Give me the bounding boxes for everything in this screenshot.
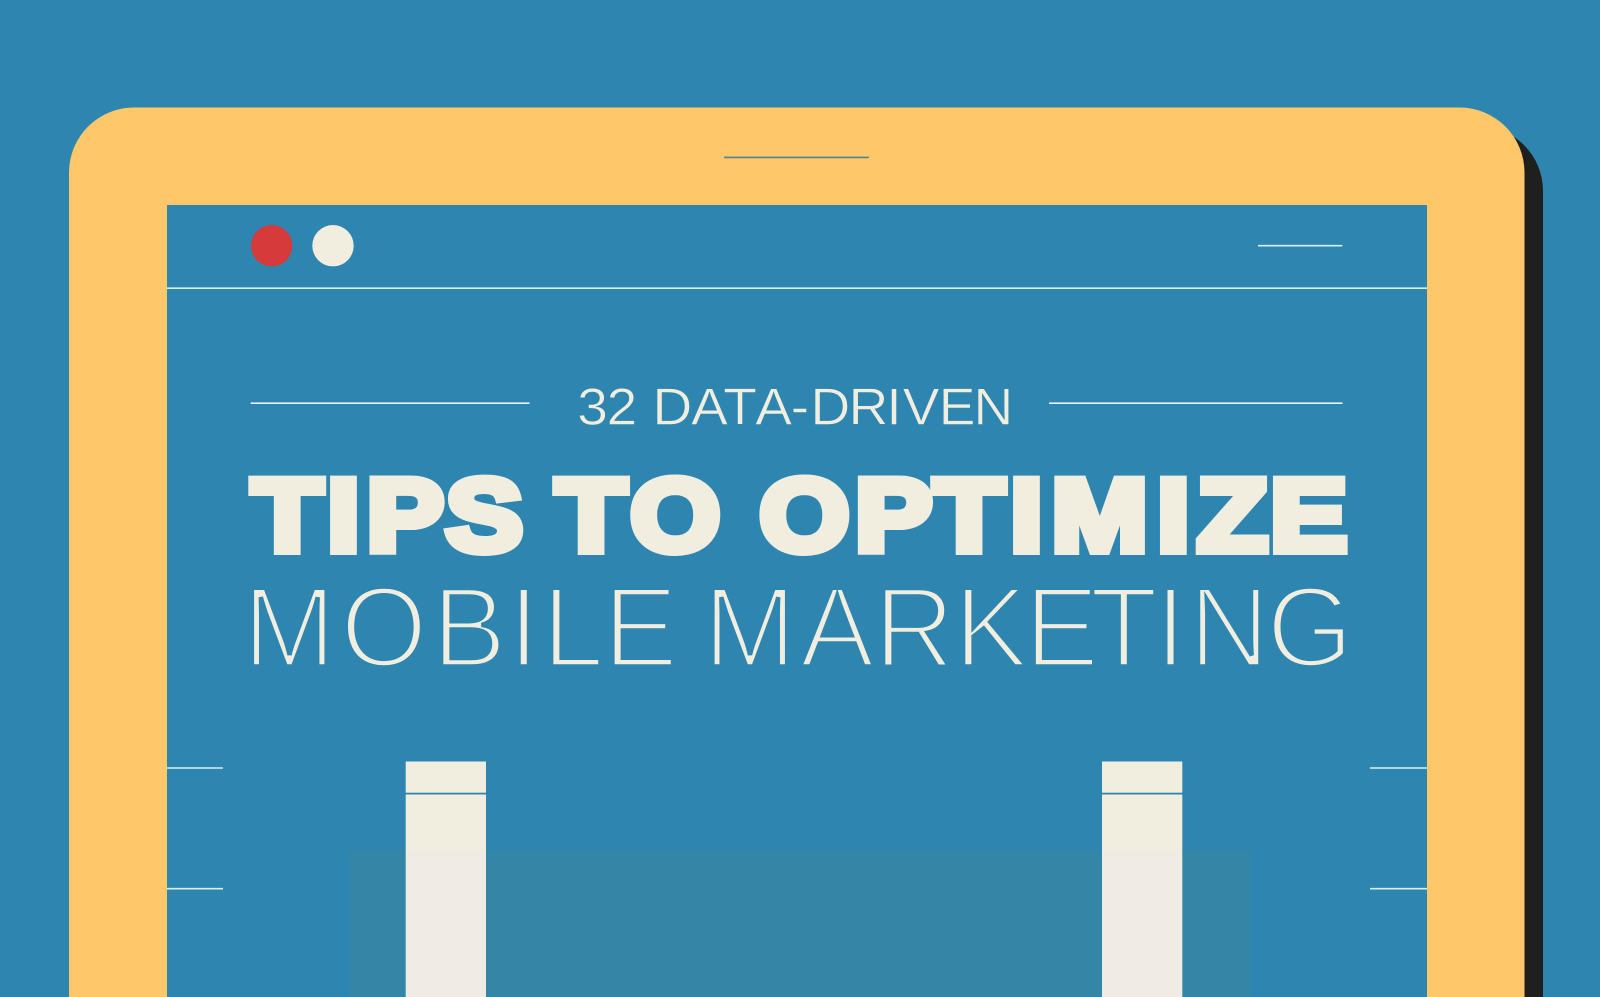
column cap (406, 762, 486, 793)
title: light line: MOBILE MARKETING (243, 563, 1353, 691)
column body upper (1102, 794, 1182, 851)
left rule (251, 402, 529, 404)
menu line (1258, 245, 1342, 247)
left column (406, 762, 486, 997)
tick marks (167, 768, 1427, 889)
icon: cream dot (312, 225, 354, 266)
column body lower (406, 851, 486, 997)
column body upper (406, 794, 486, 851)
icon: red dot (251, 225, 292, 266)
device screen (167, 205, 1427, 997)
device speaker line (724, 156, 869, 158)
subtitle text: 32 DATA-DRIVEN (577, 379, 1013, 436)
lower translucent panel (350, 851, 1250, 997)
right rule (1049, 402, 1342, 404)
right column (1102, 762, 1182, 997)
title: bold line: TIPS TO OPTIMIZE (252, 459, 1347, 572)
browser bar divider (167, 287, 1427, 289)
column cap (1102, 762, 1182, 793)
browser bar (167, 225, 1427, 288)
column body lower (1102, 851, 1182, 997)
device shadow (88, 126, 1543, 997)
